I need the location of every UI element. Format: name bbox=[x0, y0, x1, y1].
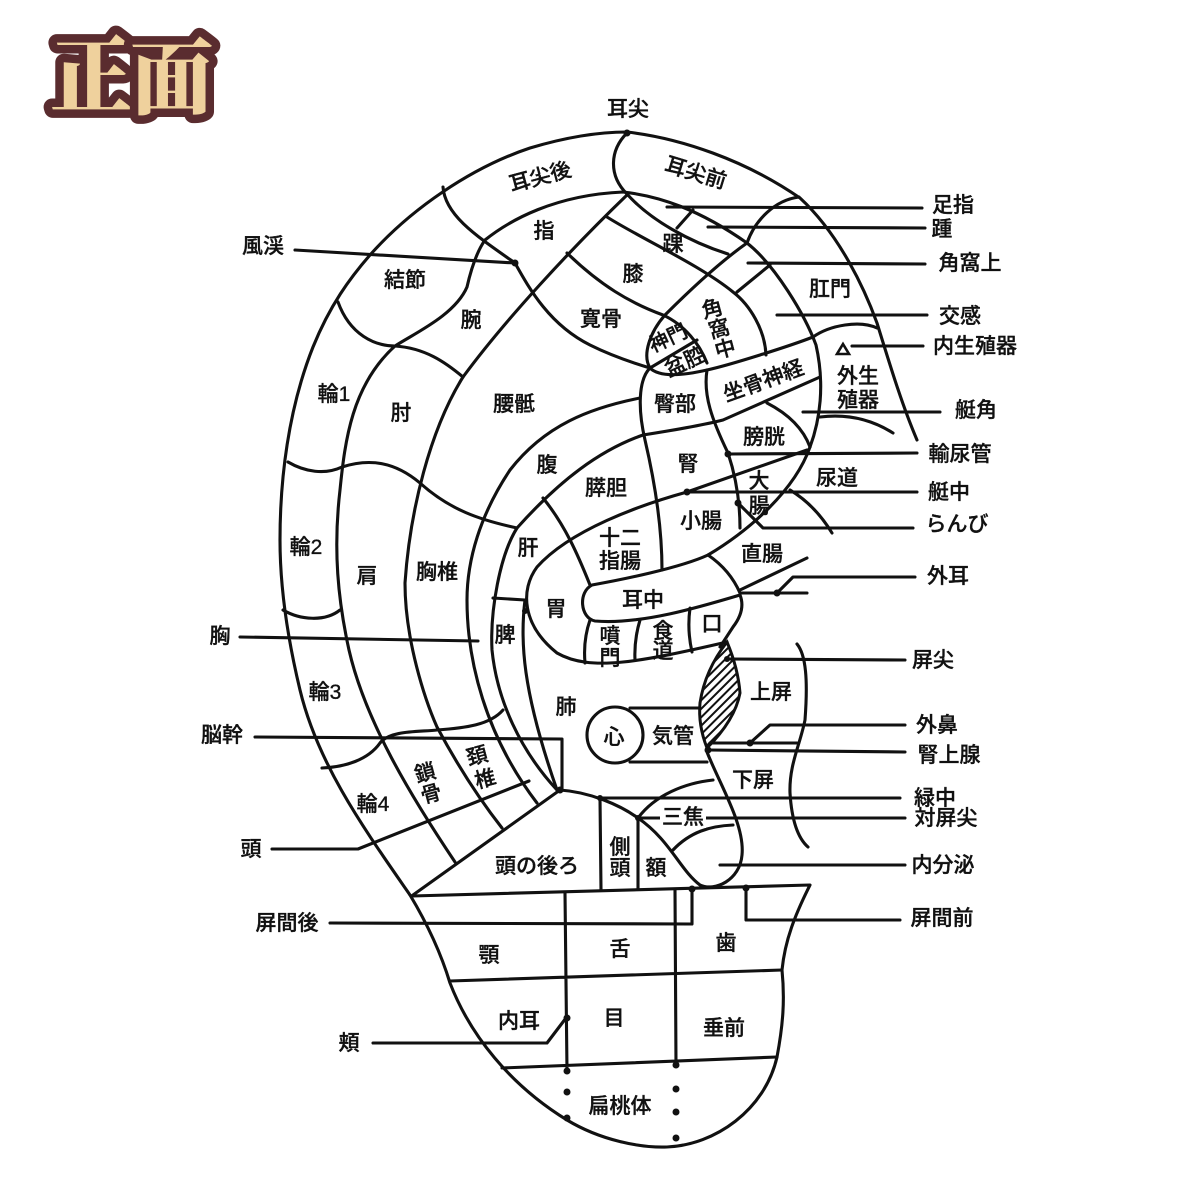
heart circle bbox=[587, 707, 643, 763]
label: 目: 目 bbox=[604, 1007, 624, 1030]
label: 腎: 腎 bbox=[678, 453, 698, 476]
outer helix bbox=[280, 132, 917, 895]
buttock right edge bbox=[706, 370, 740, 528]
mouth right edge bbox=[720, 595, 742, 647]
label: 側頭: 側 bbox=[610, 836, 630, 859]
label: 頭: 頭 bbox=[240, 838, 262, 861]
label: 食道 bbox=[652, 620, 674, 663]
leader: 屏間前 bbox=[746, 888, 900, 920]
hatched tragus bbox=[700, 642, 740, 748]
triangle marker: 外生殖器 bbox=[837, 344, 849, 354]
leader: 外耳 bbox=[777, 577, 915, 593]
label: 屏間後: 屏間後 bbox=[256, 912, 318, 935]
label: 膝: 膝 bbox=[622, 263, 644, 286]
label: 鎖骨: 鎖 bbox=[412, 760, 439, 787]
stomach outer curve bbox=[527, 450, 807, 663]
antihelix crus curve bbox=[820, 416, 893, 433]
buttock left edge bbox=[640, 368, 662, 570]
concha upper curve bbox=[492, 377, 820, 790]
label: 外生殖器 region: 殖器 bbox=[837, 389, 879, 412]
label: 耳尖前: 耳尖前 bbox=[662, 153, 729, 194]
label: 側頭: 頭 bbox=[610, 857, 630, 880]
label: 胸椎: 胸椎 bbox=[416, 561, 458, 584]
label: 外生殖器 region: 外生 bbox=[837, 365, 879, 388]
label: 足指: 足指 bbox=[932, 194, 974, 217]
label: 十二指腸: 十二 bbox=[599, 527, 641, 550]
label: 心: 心 bbox=[604, 726, 624, 749]
label: 輸尿管: 輸尿管 bbox=[928, 443, 992, 466]
antitragus outer curve bbox=[790, 644, 808, 847]
label: 緑中: 緑中 bbox=[914, 787, 956, 810]
rectum arch bbox=[708, 555, 740, 593]
label: 歯: 歯 bbox=[716, 932, 736, 955]
label: 腕: 腕 bbox=[460, 309, 482, 332]
label: 角窩上: 角窩上 bbox=[938, 252, 1002, 275]
label: 頚椎: 椎 bbox=[472, 766, 499, 793]
label: 肛門: 肛門 bbox=[809, 278, 851, 301]
urethra curve bbox=[790, 490, 832, 533]
leader lines bbox=[240, 207, 940, 1043]
label: 腰骶: 腰骶 bbox=[493, 393, 535, 416]
label: 肺: 肺 bbox=[556, 696, 576, 719]
label: 気管: 気管 bbox=[652, 725, 694, 748]
label: 扁桃体: 扁桃体 bbox=[588, 1095, 652, 1118]
label: 食道: 道 bbox=[652, 640, 674, 663]
label: 耳尖後: 耳尖後 bbox=[507, 158, 574, 197]
ear diagram outline bbox=[280, 132, 917, 1147]
leader: 角窩上 bbox=[748, 263, 925, 264]
label: 内生殖器: 内生殖器 bbox=[933, 335, 1017, 358]
label: 大腸: 大 bbox=[748, 470, 770, 493]
leader: 頬 bbox=[373, 1018, 566, 1043]
label: 腹: 腹 bbox=[536, 454, 558, 477]
marker dots bbox=[512, 130, 780, 1142]
label: 膀胱: 膀胱 bbox=[743, 426, 785, 449]
title badge: 正面 bbox=[50, 10, 214, 133]
leader: 風渓 bbox=[295, 250, 515, 263]
label: 大腸: 腸 bbox=[748, 495, 770, 518]
label: 耳尖: 耳尖 bbox=[607, 98, 649, 121]
labels bbox=[201, 98, 1017, 1118]
label: 臀部: 臀部 bbox=[654, 393, 696, 416]
inner helix and ear canal tube bbox=[337, 192, 821, 862]
label: 角窩中: 窩 bbox=[706, 316, 733, 343]
label: 小腸: 小腸 bbox=[680, 510, 722, 533]
leader: 胸 bbox=[240, 637, 478, 641]
label: 口: 口 bbox=[702, 613, 722, 636]
fossa line bbox=[607, 217, 766, 355]
label: 神門: 神門 bbox=[645, 320, 691, 357]
label: 頭の後ろ: 頭の後ろ bbox=[495, 855, 579, 878]
leader: 緑中 bbox=[600, 796, 900, 800]
label: 頬: 頬 bbox=[338, 1032, 360, 1055]
helix crus upper edge bbox=[613, 133, 728, 254]
label: 艇中: 艇中 bbox=[928, 481, 970, 504]
label: 大腸 bbox=[748, 470, 770, 518]
label: 肩: 肩 bbox=[356, 565, 378, 588]
ankle and anus dividers bbox=[677, 210, 770, 292]
shenmen divider bbox=[650, 340, 697, 368]
label: 交感: 交感 bbox=[939, 304, 981, 328]
rim dividers bbox=[283, 302, 517, 768]
outer ear line bbox=[740, 558, 807, 593]
label: 十二指腸 bbox=[599, 527, 641, 573]
label: 噴門: 噴 bbox=[600, 625, 620, 648]
label: 屏尖: 屏尖 bbox=[912, 649, 954, 672]
label: 角窩中: 角 bbox=[699, 296, 726, 323]
leader: 内分泌 bbox=[720, 863, 905, 867]
label: 寛骨: 寛骨 bbox=[580, 308, 622, 331]
title badge: 正面: 面 bbox=[130, 12, 214, 133]
label: 坐骨神経: 坐骨神経 bbox=[720, 356, 807, 407]
knee lower edge bbox=[567, 253, 707, 363]
label: 三焦: 三焦 bbox=[662, 806, 704, 829]
label: 結節: 結節 bbox=[384, 269, 426, 292]
spleen top bbox=[493, 598, 525, 600]
antihelix inner curve bbox=[467, 398, 640, 803]
leader: 艇角 bbox=[803, 410, 940, 414]
leader: 腎上腺 bbox=[708, 750, 905, 752]
leader: 足指 bbox=[667, 207, 922, 208]
label: 頚椎 bbox=[464, 743, 499, 793]
leader: 輸尿管 bbox=[728, 453, 917, 454]
label: 側頭 bbox=[610, 836, 630, 880]
label: 膵胆: 膵胆 bbox=[585, 477, 627, 500]
label: 外生殖器 region bbox=[837, 365, 879, 412]
title badge: 正面: 正 bbox=[50, 10, 134, 131]
label: 脳幹: 脳幹 bbox=[201, 724, 243, 747]
label: 腎上腺: 腎上腺 bbox=[918, 744, 980, 767]
label: 角窩中 bbox=[699, 296, 739, 363]
spleen right edge bbox=[523, 600, 557, 790]
label: 十二指腸: 指腸 bbox=[599, 550, 641, 573]
label: 輪4: 輪4 bbox=[357, 793, 390, 816]
earlobe outline bbox=[410, 885, 810, 1147]
label: 顎: 顎 bbox=[478, 944, 500, 967]
label: 輪2: 輪2 bbox=[290, 536, 322, 559]
leader: 対屏尖 bbox=[638, 816, 905, 820]
label: 内分泌: 内分泌 bbox=[912, 854, 974, 877]
leader: 艇中 bbox=[687, 490, 917, 494]
label: 艇角: 艇角 bbox=[955, 399, 997, 422]
label: 屏間前: 屏間前 bbox=[910, 907, 974, 930]
label: 垂前: 垂前 bbox=[703, 1017, 745, 1040]
lobe grid bbox=[450, 890, 782, 1071]
label: 噴門 bbox=[600, 625, 620, 670]
antihelix outer curve bbox=[405, 195, 627, 828]
leader: 踵 bbox=[708, 227, 925, 228]
label: 外鼻: 外鼻 bbox=[916, 714, 958, 737]
label: 上屏: 上屏 bbox=[750, 681, 792, 704]
conch dividers at food tube bbox=[585, 608, 692, 663]
label: 脾: 脾 bbox=[494, 624, 516, 647]
label: 直腸: 直腸 bbox=[741, 543, 783, 566]
label: 頚椎: 頚 bbox=[464, 743, 491, 770]
leader: 屏間後 bbox=[330, 889, 692, 924]
label: 食道: 食 bbox=[652, 620, 674, 643]
fossa diagonal bbox=[647, 197, 799, 368]
label: 輪3: 輪3 bbox=[309, 681, 341, 704]
leader: らんび bbox=[738, 503, 913, 528]
label: 内耳: 内耳 bbox=[498, 1010, 540, 1033]
label: 耳中: 耳中 bbox=[622, 589, 664, 612]
label: 尿道: 尿道 bbox=[816, 467, 858, 490]
label: 胸: 胸 bbox=[210, 625, 230, 648]
label: 踵: 踵 bbox=[932, 218, 952, 241]
label: 鎖骨: 骨 bbox=[418, 781, 445, 808]
label: 風渓: 風渓 bbox=[242, 235, 284, 258]
label: 肝: 肝 bbox=[518, 537, 538, 560]
lower tragus and intertragic edge bbox=[413, 752, 742, 895]
label: 肘: 肘 bbox=[390, 402, 412, 425]
label: 噴門: 門 bbox=[600, 647, 620, 670]
leader: 頭 bbox=[272, 781, 529, 849]
bladder edge bbox=[767, 403, 810, 447]
leader: 内生殖器 bbox=[852, 344, 923, 348]
white patch behind 三焦 bbox=[660, 806, 706, 828]
label: 額: 額 bbox=[646, 857, 666, 880]
label: 胃: 胃 bbox=[546, 598, 566, 621]
leader: 外鼻 bbox=[710, 725, 905, 743]
leader: 屏尖 bbox=[727, 659, 905, 660]
label: 盆腔: 盆腔 bbox=[661, 343, 709, 382]
label: 角窩中: 中 bbox=[712, 336, 739, 363]
leader: 交感 bbox=[777, 313, 927, 317]
head region dividers bbox=[600, 780, 733, 890]
label: らんび: らんび bbox=[926, 513, 988, 536]
label: 下屏: 下屏 bbox=[732, 769, 774, 792]
triangular fossa dividers bbox=[443, 187, 650, 368]
trachea lines bbox=[630, 708, 707, 762]
label: 舌: 舌 bbox=[610, 938, 630, 961]
label: 外耳: 外耳 bbox=[927, 565, 969, 588]
liver stomach divider bbox=[543, 498, 590, 585]
label: 対屏尖: 対屏尖 bbox=[914, 807, 978, 830]
label: 輪1: 輪1 bbox=[318, 383, 350, 406]
sciatic upper edge bbox=[650, 324, 877, 375]
label: 鎖骨 bbox=[412, 760, 445, 808]
leader: 脳幹 bbox=[255, 737, 562, 790]
label: 踝: 踝 bbox=[662, 233, 684, 256]
label: 指: 指 bbox=[534, 220, 554, 243]
